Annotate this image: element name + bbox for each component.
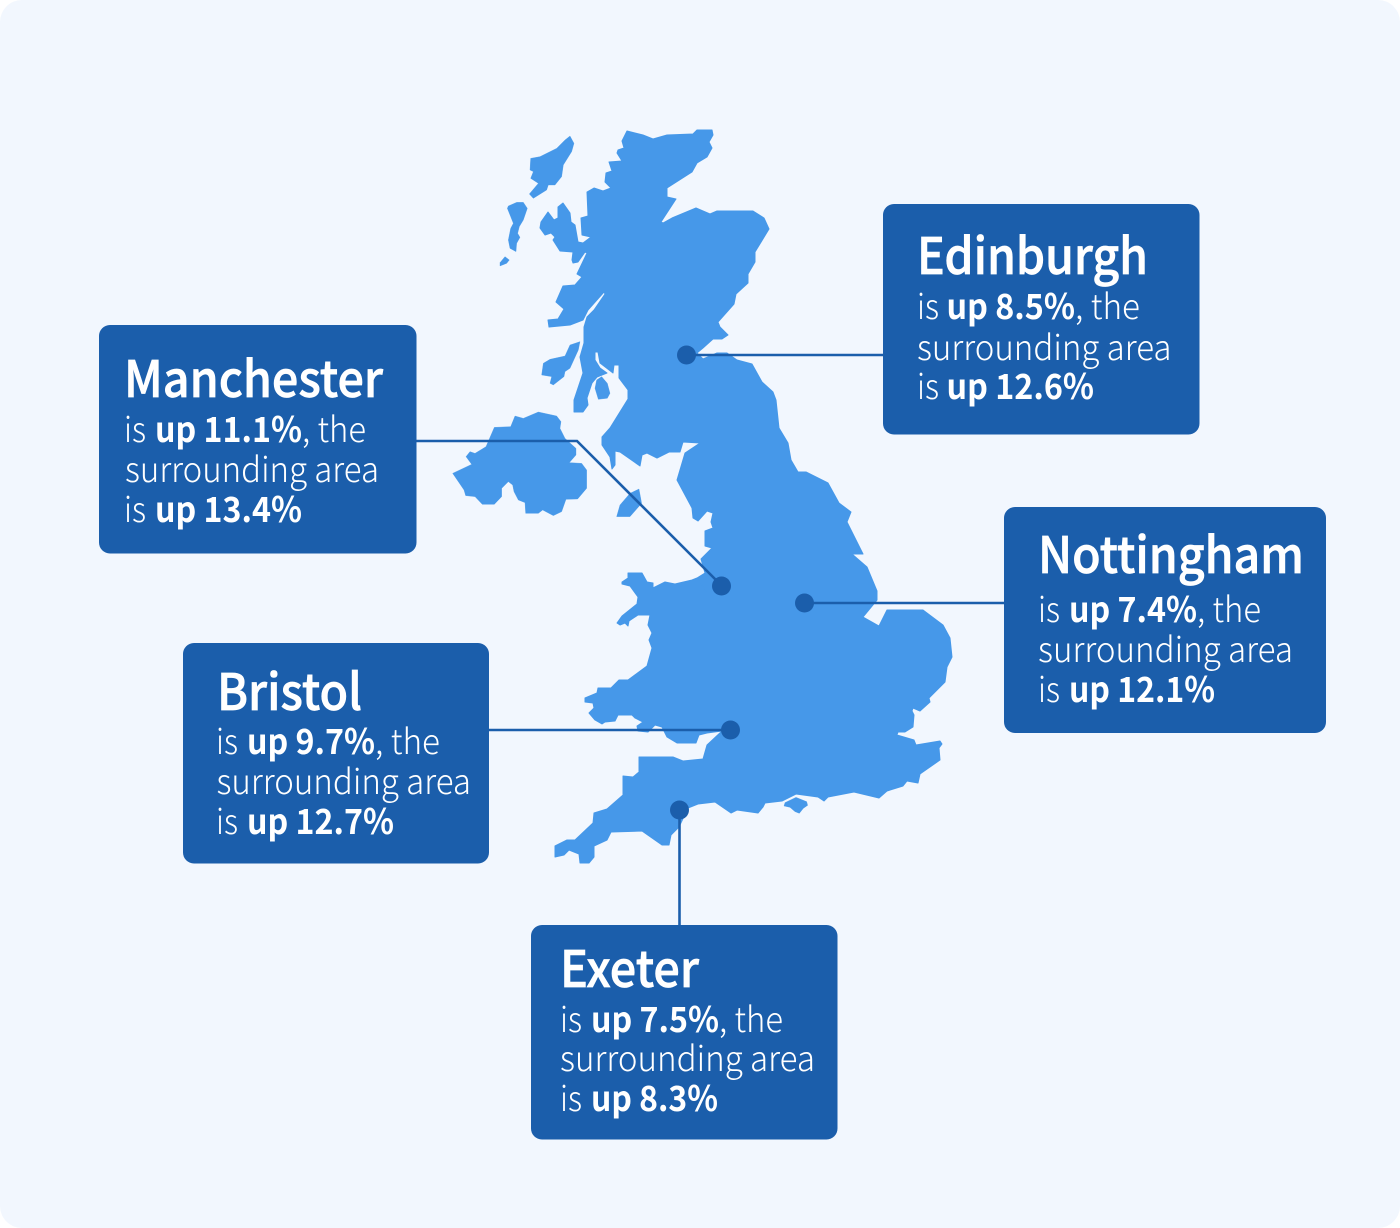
heading: Exeter: Exeter xyxy=(560,930,700,1002)
callout: Bristol xyxy=(183,643,489,864)
text: Nottingham figures: surrounding area xyxy=(1038,622,1293,673)
heading: Bristol: Bristol xyxy=(217,653,362,725)
connector: Nottingham xyxy=(804,602,1005,604)
map: Arran xyxy=(595,377,610,399)
callout: Exeter xyxy=(531,925,838,1140)
text: Edinburgh figures: surrounding area xyxy=(917,320,1172,371)
map: Isle of Man xyxy=(617,489,642,517)
text: Exeter figures: up 7.5% xyxy=(591,992,719,1043)
text: Edinburgh figures: is xyxy=(917,279,939,330)
text: Exeter figures: up 8.3% xyxy=(591,1071,718,1122)
connector: Manchester xyxy=(415,441,722,586)
text: Bristol figures: up 12.7% xyxy=(247,794,394,845)
text: Bristol figures: is xyxy=(216,714,238,765)
map: Northern Ireland xyxy=(453,412,587,516)
text: Bristol figures: , the xyxy=(375,714,440,765)
dot: Bristol xyxy=(721,720,740,740)
dot: Edinburgh xyxy=(677,346,696,364)
text: Manchester figures: is xyxy=(124,482,146,533)
connector: Edinburgh xyxy=(686,354,884,356)
text: Exeter figures xyxy=(560,992,815,1122)
map: Barra xyxy=(500,257,509,266)
text: Manchester figures: up 11.1% xyxy=(155,402,302,453)
map: Uist xyxy=(507,202,527,252)
callout: Edinburgh xyxy=(883,204,1200,434)
map: Islay and Jura xyxy=(542,342,580,385)
text: Exeter figures: is xyxy=(560,992,582,1043)
text: Manchester figures xyxy=(124,402,379,533)
dot: Manchester xyxy=(712,576,731,596)
dot: Nottingham xyxy=(795,594,814,612)
callout: Nottingham xyxy=(1004,507,1326,733)
text: Exeter figures: is xyxy=(560,1071,582,1122)
text: Manchester figures: is xyxy=(124,402,146,453)
text: Nottingham figures: up 7.4% xyxy=(1069,582,1197,633)
text: Nottingham figures: up 12.1% xyxy=(1069,662,1215,713)
map: Great Britain mainland xyxy=(540,130,952,863)
text: Edinburgh figures: is xyxy=(917,359,939,410)
text: Nottingham figures xyxy=(1038,582,1293,713)
text: Edinburgh figures xyxy=(917,279,1172,410)
text: Exeter figures: surrounding area xyxy=(560,1031,815,1082)
connector: Bristol xyxy=(488,729,731,731)
text: Edinburgh figures: up 8.5% xyxy=(946,279,1075,330)
text: Bristol figures xyxy=(216,714,471,845)
map: United Kingdom xyxy=(453,130,952,863)
text: Nottingham figures: , the xyxy=(1197,582,1261,633)
map: Lewis and Harris xyxy=(529,136,574,198)
text: Manchester figures: surrounding area xyxy=(125,442,379,493)
text: Edinburgh figures: up 12.6% xyxy=(946,359,1094,410)
text: Bristol figures: surrounding area xyxy=(216,754,471,805)
map: Isle of Wight xyxy=(784,797,808,813)
text: Manchester figures: , the xyxy=(302,402,366,453)
text: Nottingham figures: is xyxy=(1038,582,1060,633)
heading: Nottingham: Nottingham xyxy=(1038,516,1304,588)
heading: Edinburgh: Edinburgh xyxy=(917,217,1148,289)
text: Exeter figures: , the xyxy=(719,992,783,1043)
connector: Exeter xyxy=(678,810,681,926)
dot: Exeter xyxy=(670,800,689,820)
text: Nottingham figures: is xyxy=(1038,662,1060,713)
text: Edinburgh figures: , the xyxy=(1075,279,1140,330)
callout: Manchester xyxy=(99,325,416,554)
text: Bristol figures: up 9.7% xyxy=(247,714,375,765)
heading: Manchester: Manchester xyxy=(124,340,384,412)
text: Bristol figures: is xyxy=(216,794,238,845)
text: Manchester figures: up 13.4% xyxy=(155,482,302,533)
